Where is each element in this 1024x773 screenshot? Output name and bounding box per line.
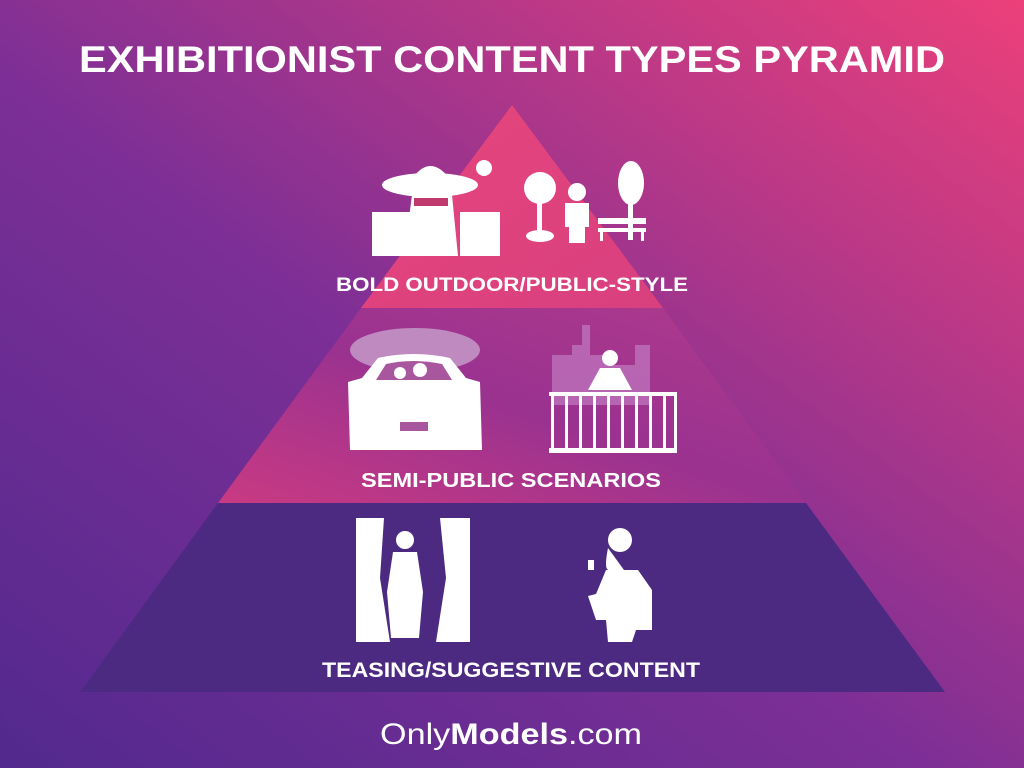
footer logo: Only Models .com	[380, 718, 642, 751]
tier: bold outdoor/public-style	[336, 105, 688, 308]
label: SEMI-PUBLIC SCENARIOS	[361, 470, 661, 492]
icon: car	[348, 328, 482, 450]
title: EXHIBITIONIST CONTENT TYPES PYRAMID	[79, 39, 945, 80]
icon: robe behind curtains	[356, 518, 470, 642]
icon: man in park	[524, 161, 646, 243]
pyramid	[80, 105, 945, 692]
tier: teasing/suggestive content	[80, 503, 945, 692]
label: BOLD OUTDOOR/PUBLIC-STYLE	[336, 275, 688, 296]
tier: semi-public scenarios	[218, 308, 806, 503]
icon: woman on balcony	[549, 325, 677, 453]
icon: woman with phone	[588, 528, 652, 642]
label: TEASING/SUGGESTIVE CONTENT	[322, 659, 700, 682]
icon: woman with sun hat	[372, 160, 500, 256]
